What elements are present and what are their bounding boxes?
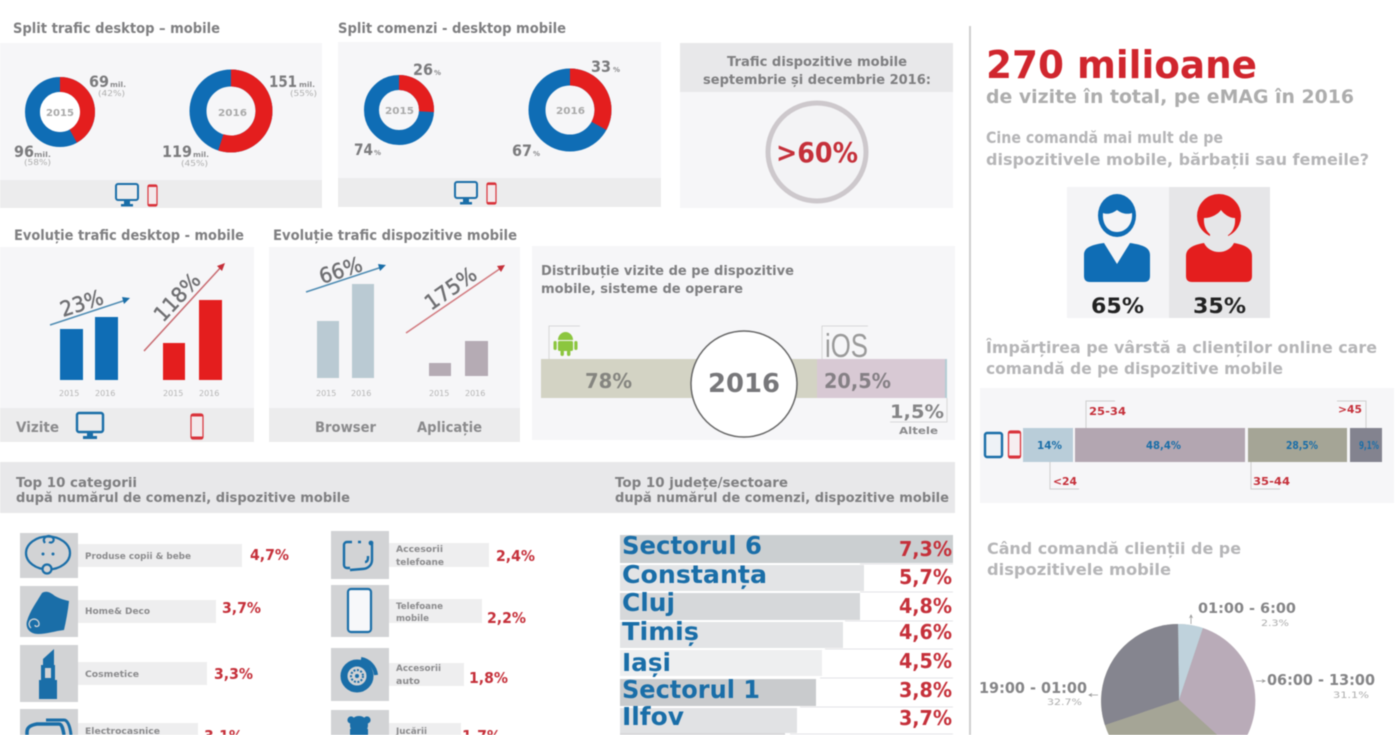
traffic value labels: 119 <box>162 142 192 161</box>
row: cosmetice: Cosmetice <box>85 670 139 680</box>
order value labels: 26 <box>413 60 433 79</box>
age labels: 25-34 <box>1089 405 1126 418</box>
county names: Sectorul 1 <box>622 675 760 704</box>
row: accesorii telefoane <box>331 531 535 579</box>
heading: split trafic: Split trafic desktop – mobile <box>13 21 220 37</box>
icon: phone <box>148 185 157 206</box>
order value labels: % <box>533 150 540 158</box>
arrow: mobile growth <box>144 263 225 351</box>
badge: 2016 <box>691 331 797 437</box>
row: accesorii auto: Accesorii <box>396 664 441 674</box>
row: telefoane mobile <box>331 585 526 637</box>
donut 2016 orders <box>537 77 603 143</box>
label: 01:00-6:00: 2.3% <box>1261 619 1290 629</box>
bar chart: visits: 2016 <box>199 389 219 398</box>
stacked age bar <box>1023 428 1382 462</box>
arrow: browser growth <box>306 252 386 292</box>
icon: tablet <box>985 433 1002 457</box>
age labels: >45 <box>1338 403 1362 416</box>
county values: 5,7% <box>899 565 952 589</box>
order value labels: 74 <box>354 140 373 159</box>
panel: evolutie trafic dispozitive mobile <box>269 228 520 442</box>
panel: evolutie trafic desktop mobile <box>0 228 254 442</box>
county names: Cluj <box>622 588 675 617</box>
heading: cand comanda: Când comandă clienții de pe <box>987 539 1241 558</box>
label: other systems: Altele <box>899 426 938 437</box>
row: accesorii auto: auto <box>396 677 420 687</box>
stacked bar: 20,5% <box>824 369 891 393</box>
stacked age bar: 9,1% <box>1359 439 1379 452</box>
heading: impartirea pe varsta <box>986 338 1377 378</box>
heading: cand comanda: dispozitivele mobile <box>987 560 1171 579</box>
order value labels <box>354 57 620 160</box>
heading: cine comanda: Cine comandă mai mult de pe <box>986 128 1223 147</box>
panel: split trafic desktop mobile <box>0 21 322 208</box>
traffic value labels: (55%) <box>290 89 317 98</box>
panel: top 10 heading band <box>0 462 955 513</box>
icon: phone <box>1008 431 1020 458</box>
arrow: desktop growth <box>50 285 130 325</box>
row: produse copii si bebe: 4,7% <box>250 546 289 564</box>
heading: cine comanda: dispozitivele mobile, bărbații sau femeile? <box>986 150 1369 169</box>
label: vizite: Vizite <box>16 420 59 436</box>
heading: mobile, sisteme de operare <box>541 282 743 297</box>
row: cosmetice: 3,3% <box>214 665 253 683</box>
stacked bar: 78% <box>585 369 632 393</box>
icon: desktop <box>77 413 103 439</box>
panel: split comenzi <box>338 21 661 207</box>
badge: 2016: 2016 <box>708 369 780 399</box>
icon: man <box>1084 194 1150 282</box>
row: accesorii telefoane: telefoane <box>396 558 444 568</box>
arrow: app growth <box>406 262 505 333</box>
heading: counties: după numărul de comenzi, dispozitive mobile <box>615 491 949 506</box>
headline: 270 milioane: 270 milioane <box>986 43 1257 87</box>
county values: 7,3% <box>899 537 952 561</box>
county values: 4,8% <box>899 594 952 618</box>
label: 01:00-6:00 <box>1190 601 1296 629</box>
county values: 4,5% <box>899 649 952 673</box>
county names: Sectorul 6 <box>622 531 762 560</box>
bar chart: visits <box>59 300 222 398</box>
donut 2015 traffic: 2015 <box>46 108 74 119</box>
traffic value labels <box>14 72 317 168</box>
label: 19:00-01:00: 19:00 - 01:00 <box>979 679 1087 697</box>
heading: categories: Top 10 categorii <box>16 476 137 491</box>
icon: desktop <box>116 184 138 206</box>
heading: Evoluție trafic dispozitive mobile <box>273 228 517 244</box>
bar chart: visits: 2016 <box>95 389 115 398</box>
row: produse copii si bebe: Produse copii & bebe <box>85 552 191 562</box>
age labels: 35-44 <box>1253 475 1290 488</box>
arrow: desktop growth: 23% <box>57 285 106 322</box>
label: other systems: 1,5% <box>890 401 944 423</box>
order value labels: % <box>613 66 620 74</box>
stacked bar <box>541 359 947 398</box>
traffic value labels: mil. <box>34 151 51 159</box>
row: accesorii auto <box>331 648 508 701</box>
bar chart: browser vs app: 2016 <box>351 389 371 398</box>
county names: Constanța <box>622 560 767 589</box>
donut 2016 traffic <box>198 78 264 144</box>
age labels <box>1050 401 1366 489</box>
row: produse copii si bebe <box>20 533 289 578</box>
county names: Timiș <box>622 617 699 646</box>
stacked age bar: 14% <box>1037 439 1062 452</box>
heading: categories: după numărul de comenzi, dispozitive mobile <box>16 491 350 506</box>
heading: Distribuție vizite de pe dispozitive <box>541 264 794 279</box>
heading: Evoluție trafic desktop - mobile <box>14 228 244 244</box>
headline: 270 milioane <box>986 43 1354 108</box>
panel: age split <box>980 388 1394 503</box>
bar chart: browser vs app: 2016 <box>465 389 485 398</box>
donut 2015 traffic <box>32 84 88 140</box>
row: accesorii telefoane: 2,4% <box>496 547 535 565</box>
headline: 270 milioane: de vizite în total, pe eMAG în 2016 <box>986 86 1354 108</box>
county names: Ilfov <box>622 702 684 731</box>
chart: top counties <box>620 531 953 735</box>
county names <box>622 531 767 731</box>
traffic value labels: 96 <box>14 142 34 161</box>
heading: impartirea pe varsta: Împărțirea pe vârstă a clienților online care <box>986 338 1377 357</box>
callout: more than 60 percent: >60% <box>776 136 858 169</box>
traffic value labels: (45%) <box>181 159 208 168</box>
label: 01:00-6:00: 01:00 - 6:00 <box>1198 601 1296 617</box>
panel heading: septembrie și decembrie 2016: <box>703 73 931 88</box>
row: electrocasnice <box>20 709 243 735</box>
traffic value labels: mil. <box>110 81 126 89</box>
stacked age bar: 48,4% <box>1146 439 1181 452</box>
order value labels: % <box>434 69 441 77</box>
label: 06:00-13:00: 31.1% <box>1333 691 1370 701</box>
county names: Iași <box>622 648 671 677</box>
label: aplicatie: Aplicație <box>417 420 482 436</box>
panel: gender split <box>1067 187 1270 318</box>
county values: 3,7% <box>899 706 952 730</box>
icon: woman <box>1186 194 1252 282</box>
donut 2015 orders <box>372 82 426 138</box>
icon: android <box>549 326 947 422</box>
bar chart: browser vs app: 2015 <box>429 389 449 398</box>
heading <box>541 264 794 297</box>
heading: cand comanda <box>987 539 1241 579</box>
row: home and deco: 3,7% <box>222 599 261 617</box>
heading: counties: Top 10 județe/sectoare <box>615 476 788 491</box>
traffic value labels: (42%) <box>98 89 125 98</box>
chart: top categories <box>20 531 535 735</box>
callout: more than 60 percent <box>768 103 866 201</box>
traffic value labels: 69 <box>89 72 109 91</box>
order value labels: 33 <box>591 57 611 76</box>
traffic value labels: 151 <box>269 72 297 91</box>
label: 19:00-01:00 <box>979 679 1098 708</box>
row: telefoane mobile: 2,2% <box>487 609 526 627</box>
age labels: <24 <box>1053 475 1077 488</box>
value: women: 35% <box>1193 294 1246 318</box>
panel heading <box>703 55 931 88</box>
row: accesorii auto: 1,8% <box>469 669 508 687</box>
arrow: app growth: 175% <box>420 262 481 315</box>
row: cosmetice <box>20 645 253 702</box>
heading: counties <box>615 476 949 506</box>
pie chart: order time <box>1101 624 1255 735</box>
label: browser: Browser <box>315 420 376 436</box>
row: telefoane mobile: mobile <box>396 614 429 624</box>
bar chart: browser vs app: 2015 <box>316 389 336 398</box>
panel: distributie sisteme de operare <box>532 246 955 440</box>
row: telefoane mobile: Telefoane <box>396 602 443 612</box>
label: 19:00-01:00: 32.7% <box>1047 698 1083 708</box>
donut 2016 orders: 2016 <box>556 106 585 117</box>
icon: phone <box>487 183 496 204</box>
icon: desktop <box>455 182 477 204</box>
arrow: browser growth: 66% <box>316 252 365 289</box>
icon: phone <box>191 414 203 439</box>
county values: 4,6% <box>899 620 952 644</box>
bar chart: visits: 2015 <box>163 389 183 398</box>
label: 06:00-13:00 <box>1256 671 1375 701</box>
traffic value labels: mil. <box>299 81 315 89</box>
panel: trafic dispozitive mobile <box>680 43 953 208</box>
label: 06:00-13:00: 06:00 - 13:00 <box>1267 671 1375 689</box>
heading: cine comanda <box>986 128 1369 169</box>
row: jucarii <box>331 710 501 735</box>
donut 2016 traffic: 2016 <box>218 108 247 119</box>
row: home and deco: Home& Deco <box>85 607 150 617</box>
heading: split comenzi: Split comenzi - desktop mobile <box>338 21 566 37</box>
value: men: 65% <box>1091 294 1144 318</box>
label: iOS: iOS <box>825 327 868 364</box>
panel heading: Trafic dispozitive mobile <box>727 55 907 70</box>
donut 2015 orders: 2015 <box>385 106 414 117</box>
stacked age bar: 28,5% <box>1286 439 1318 452</box>
arrow: mobile growth: 118% <box>149 268 206 326</box>
bar chart: visits: 2015 <box>59 389 79 398</box>
heading: categories <box>16 476 350 506</box>
label: other systems <box>890 401 944 437</box>
bar chart: browser vs app <box>316 284 488 398</box>
order value labels: % <box>374 149 381 157</box>
order value labels: 67 <box>512 141 532 160</box>
heading: impartirea pe varsta: comandă de pe dispozitive mobile <box>986 359 1283 378</box>
traffic value labels: mil. <box>193 151 209 159</box>
county values <box>899 537 952 730</box>
row: accesorii telefoane: Accesorii <box>396 545 443 555</box>
county values: 3,8% <box>899 678 952 702</box>
row: home and deco <box>20 586 261 637</box>
traffic value labels: (58%) <box>24 158 51 167</box>
